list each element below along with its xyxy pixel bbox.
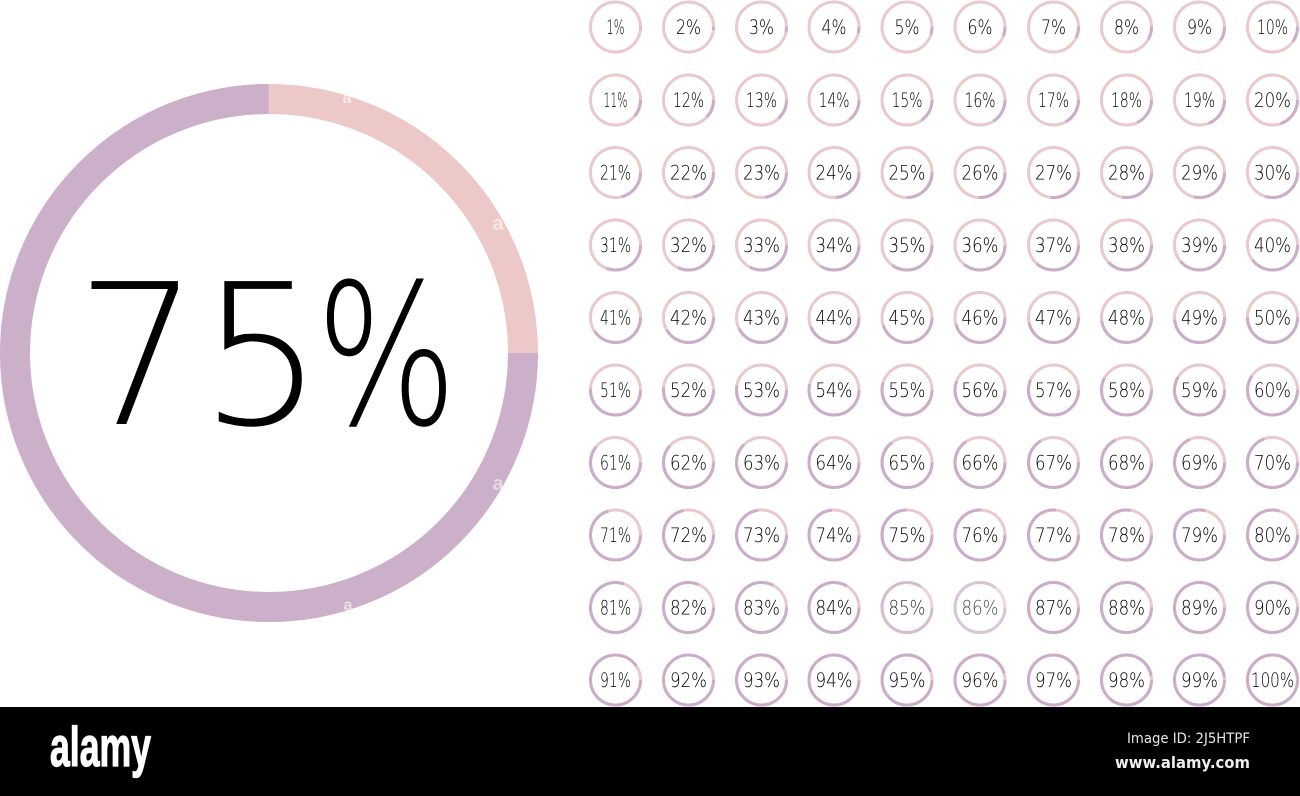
gauge 21%: 21% (600, 162, 631, 184)
gauge 2%: 2% (676, 16, 701, 39)
gauge 44%: 44% (816, 306, 852, 330)
gauge 71% (590, 510, 640, 560)
gauge 1%: 1% (606, 16, 624, 39)
gauge 13%: 13% (746, 89, 777, 112)
gauge 40%: 40% (1254, 234, 1291, 257)
gauge 5%: 5% (894, 16, 920, 39)
gauge 45% (882, 292, 932, 342)
gauge 3% (736, 2, 786, 52)
gauge 18% (1102, 75, 1152, 125)
gauge 61% (590, 438, 640, 488)
gauge 81% (590, 582, 640, 632)
gauge 27% (1028, 148, 1078, 198)
gauge 61%: 61% (600, 452, 631, 474)
gauge 65%: 65% (888, 452, 926, 474)
gauge 98%: 98% (1108, 669, 1145, 692)
gauge 65% (882, 438, 932, 488)
gauge 75% (882, 510, 932, 560)
gauge 54%: 54% (816, 379, 852, 402)
gauge 57% (1028, 365, 1078, 415)
gauge 85% (882, 582, 932, 632)
gauge 46%: 46% (962, 306, 998, 330)
gauge 96% (955, 655, 1005, 705)
gauge 25% (882, 148, 932, 198)
gauge 33% (736, 220, 786, 270)
gauge 46% (955, 292, 1005, 342)
gauge 39% (1174, 220, 1224, 270)
gauge 74%: 74% (816, 524, 852, 547)
gauge 4% (809, 2, 859, 52)
gauge 34%: 34% (816, 234, 852, 257)
gauge 14% (809, 75, 859, 125)
gauge 33%: 33% (743, 234, 780, 257)
gauge 24%: 24% (816, 162, 852, 184)
gauge 20%: 20% (1254, 89, 1291, 112)
gauge 14%: 14% (818, 89, 850, 112)
gauge 18%: 18% (1111, 89, 1142, 112)
gauge 43%: 43% (743, 306, 780, 330)
gauge 80%: 80% (1254, 524, 1291, 547)
gauge 90% (1248, 582, 1298, 632)
gauge 67%: 67% (1035, 452, 1072, 474)
gauge 49% (1174, 292, 1224, 342)
gauge 72% (664, 510, 714, 560)
gauge 76% (955, 510, 1005, 560)
gauge 36%: 36% (962, 234, 998, 257)
gauge 54% (809, 365, 859, 415)
gauge 10%: 10% (1257, 16, 1288, 39)
gauge 43% (736, 292, 786, 342)
gauge 96%: 96% (962, 669, 998, 692)
gauge 64%: 64% (816, 452, 852, 474)
gauge 5% (882, 2, 932, 52)
gauge 9%: 9% (1187, 16, 1212, 39)
gauge 90%: 90% (1254, 596, 1291, 620)
gauge 11% (590, 75, 640, 125)
gauge 70% (1248, 438, 1298, 488)
gauge 8% (1102, 2, 1152, 52)
gauge 72%: 72% (670, 524, 707, 547)
gauge 16% (955, 75, 1005, 125)
gauge 30% (1248, 148, 1298, 198)
gauge 35% (882, 220, 932, 270)
gauge 40% (1248, 220, 1298, 270)
gauge 97%: 97% (1035, 669, 1072, 692)
gauge 49%: 49% (1181, 306, 1218, 330)
gauge 69% (1174, 438, 1224, 488)
gauge 31% (590, 220, 640, 270)
large donut gauge 75%: a (492, 473, 504, 495)
gauge 30%: 30% (1254, 162, 1291, 184)
gauge 81%: 81% (600, 596, 631, 620)
gauge 77%: 77% (1035, 524, 1072, 547)
gauge 95% (882, 655, 932, 705)
gauge 52%: 52% (670, 379, 707, 402)
gauge 48%: 48% (1108, 306, 1145, 330)
gauge 70%: 70% (1254, 452, 1291, 474)
gauge 8%: 8% (1114, 16, 1139, 39)
gauge 88%: 88% (1108, 596, 1145, 620)
gauge 82%: 82% (670, 596, 707, 620)
gauge 51%: 51% (600, 379, 631, 402)
gauge 78%: 78% (1108, 524, 1145, 547)
gauge 56% (955, 365, 1005, 415)
gauge 22% (664, 148, 714, 198)
gauge 62% (664, 438, 714, 488)
gauge 93% (736, 655, 786, 705)
gauge 16%: 16% (964, 89, 996, 112)
alamy logo: alamy (50, 715, 151, 778)
large donut gauge 75%: 75 (76, 243, 324, 471)
gauge 17% (1028, 75, 1078, 125)
gauge 26% (955, 148, 1005, 198)
gauge 7% (1028, 2, 1078, 52)
gauge 48% (1102, 292, 1152, 342)
gauge 86%: 86% (962, 596, 998, 620)
gauge 91%: 91% (600, 669, 631, 692)
gauge 36% (955, 220, 1005, 270)
gauge 89% (1174, 582, 1224, 632)
gauge 92%: 92% (670, 669, 707, 692)
gauge 100% (1248, 655, 1298, 705)
gauge 29%: 29% (1181, 162, 1218, 184)
gauge 73%: 73% (743, 524, 780, 547)
gauge 41%: 41% (600, 306, 631, 330)
gauge 19% (1174, 75, 1224, 125)
gauge 28%: 28% (1108, 162, 1145, 184)
gauge 47%: 47% (1035, 306, 1072, 330)
gauge 22%: 22% (670, 162, 707, 184)
gauge 15% (882, 75, 932, 125)
gauge 23% (736, 148, 786, 198)
gauge 7%: 7% (1041, 16, 1066, 39)
gauge 89%: 89% (1181, 596, 1218, 620)
gauge 42% (664, 292, 714, 342)
gauge 79% (1174, 510, 1224, 560)
gauge 58% (1102, 365, 1152, 415)
gauge 59% (1174, 365, 1224, 415)
gauge 63%: 63% (743, 452, 780, 474)
gauge 57%: 57% (1035, 379, 1072, 402)
gauge 29% (1174, 148, 1224, 198)
gauge 42%: 42% (670, 306, 707, 330)
gauge 82% (664, 582, 714, 632)
gauge 99%: 99% (1181, 669, 1218, 692)
gauge 58%: 58% (1108, 379, 1145, 402)
gauge 39%: 39% (1181, 234, 1218, 257)
gauge 32% (664, 220, 714, 270)
gauge 4%: 4% (822, 16, 846, 39)
gauge 83% (736, 582, 786, 632)
gauge 44% (809, 292, 859, 342)
gauge 37% (1028, 220, 1078, 270)
gauge 63% (736, 438, 786, 488)
gauge 69%: 69% (1181, 452, 1218, 474)
gauge 56%: 56% (962, 379, 998, 402)
gauge 47% (1028, 292, 1078, 342)
gauge 24% (809, 148, 859, 198)
gauge 60% (1248, 365, 1298, 415)
gauge 34% (809, 220, 859, 270)
gauge 77% (1028, 510, 1078, 560)
gauge 68% (1102, 438, 1152, 488)
gauge 93%: 93% (743, 669, 780, 692)
gauge 9% (1174, 2, 1224, 52)
gauge 94%: 94% (816, 669, 852, 692)
website text: www.alamy.com (1115, 753, 1250, 772)
gauge 88% (1102, 582, 1152, 632)
gauge 79%: 79% (1181, 524, 1218, 547)
gauge 37%: 37% (1035, 234, 1072, 257)
gauge 86% (955, 582, 1005, 632)
gauge 11%: 11% (604, 89, 627, 112)
gauge 50%: 50% (1254, 306, 1291, 330)
gauge 51% (590, 365, 640, 415)
large donut gauge 75% (15, 90, 523, 614)
gauge 52% (664, 365, 714, 415)
gauge 92% (664, 655, 714, 705)
image id text: Image ID: 2J5HTPF (1127, 731, 1250, 747)
gauge 35%: 35% (888, 234, 926, 257)
gauge 80% (1248, 510, 1298, 560)
gauge 20% (1248, 75, 1298, 125)
gauge 53% (736, 365, 786, 415)
large donut gauge 75%: a (343, 90, 352, 107)
gauge 85%: 85% (888, 596, 926, 620)
gauge 91% (590, 655, 640, 705)
gauge 6%: 6% (968, 16, 992, 39)
gauge 38%: 38% (1108, 234, 1145, 257)
gauge 15%: 15% (892, 89, 922, 112)
gauge 31%: 31% (600, 234, 631, 257)
gauge 45%: 45% (888, 306, 926, 330)
large donut gauge 75%: % (316, 243, 457, 471)
gauge 55% (882, 365, 932, 415)
gauge 78% (1102, 510, 1152, 560)
gauge 27%: 27% (1035, 162, 1072, 184)
gauge 50% (1248, 292, 1298, 342)
gauge 59%: 59% (1181, 379, 1218, 402)
gauge 60%: 60% (1254, 379, 1291, 402)
large donut gauge 75%: a (492, 213, 504, 235)
gauge 87% (1028, 582, 1078, 632)
gauge 10% (1248, 2, 1298, 52)
gauge 3%: 3% (749, 16, 774, 39)
gauge 98% (1102, 655, 1152, 705)
gauge 99% (1174, 655, 1224, 705)
gauge 68%: 68% (1108, 452, 1145, 474)
gauge 55%: 55% (888, 379, 926, 402)
gauge 97% (1028, 655, 1078, 705)
gauge 53%: 53% (743, 379, 780, 402)
gauge 2% (664, 2, 714, 52)
gauge 19%: 19% (1184, 89, 1215, 112)
gauge 66%: 66% (962, 452, 998, 474)
gauge 17%: 17% (1038, 89, 1069, 112)
gauge 71%: 71% (600, 524, 631, 547)
gauge 28% (1102, 148, 1152, 198)
gauge 23%: 23% (743, 162, 780, 184)
gauge 73% (736, 510, 786, 560)
gauge 26%: 26% (962, 162, 998, 184)
gauge 12% (664, 75, 714, 125)
gauge 75%: 75% (888, 524, 926, 547)
gauge 67% (1028, 438, 1078, 488)
gauge 6% (955, 2, 1005, 52)
gauge 21% (590, 148, 640, 198)
gauge 94% (809, 655, 859, 705)
gauge 1% (590, 2, 640, 52)
large donut gauge 75%: a (344, 597, 353, 614)
gauge 87%: 87% (1035, 596, 1072, 620)
gauge 76%: 76% (962, 524, 998, 547)
gauge 25%: 25% (888, 162, 926, 184)
gauge 38% (1102, 220, 1152, 270)
gauge 12%: 12% (673, 89, 704, 112)
gauge 41% (590, 292, 640, 342)
gauge 66% (955, 438, 1005, 488)
gauge 84% (809, 582, 859, 632)
gauge 64% (809, 438, 859, 488)
gauge 62%: 62% (670, 452, 707, 474)
gauge 83%: 83% (743, 596, 780, 620)
gauge 32%: 32% (670, 234, 707, 257)
gauge 13% (736, 75, 786, 125)
gauge 95%: 95% (888, 669, 926, 692)
gauge 84%: 84% (816, 596, 852, 620)
footer bar (0, 707, 1300, 796)
gauge 74% (809, 510, 859, 560)
